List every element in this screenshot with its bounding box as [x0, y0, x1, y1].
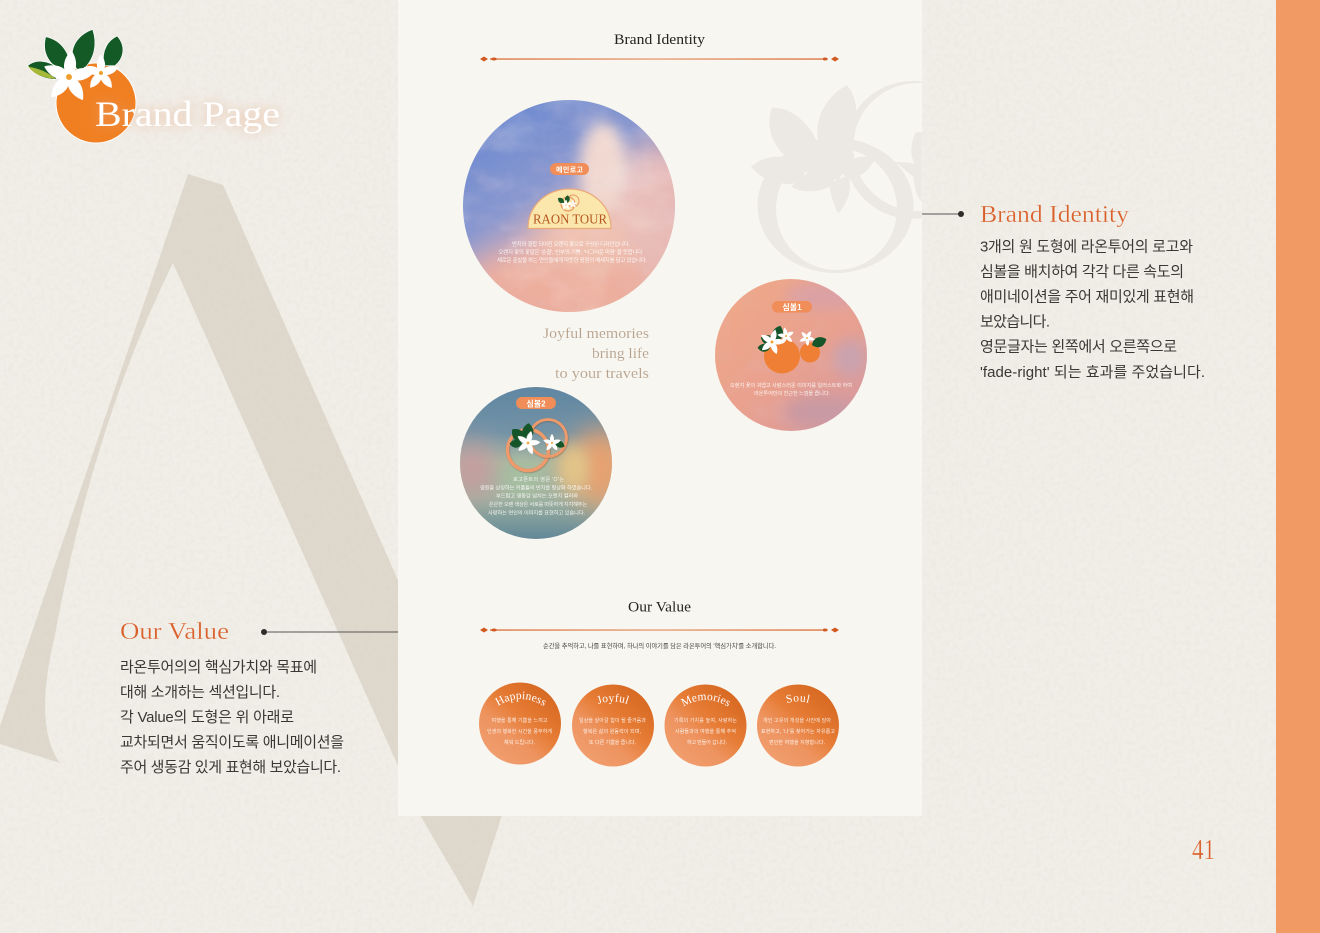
circle: symbol 1: [715, 279, 867, 431]
value circle: Happiness: Happiness: [494, 692, 546, 706]
description: symbol 2: 부드럽고 생동감 넘치는 오렌지 컬러와: [496, 492, 578, 500]
callout text: Our Value: 각 Value의 도형은 위 아래로: [120, 709, 294, 726]
description: main logo: 오렌지 꽃의 꽃말은 '순결', '신부의 기쁨', '너그러운 마음' 을 뜻합니다.: [498, 248, 644, 256]
callout text: Our Value: [120, 659, 344, 776]
divider: Our Value: [480, 628, 839, 632]
value circle: Joyful: 또 다른 기쁨을 줍니다.: [589, 739, 636, 746]
description: symbol 1: 오렌지 꽃의 귀엽고 사랑스러운 이미지를 일러스트화 하여: [730, 381, 852, 389]
value circle: Soul: 개인 고유의 개성을 사진에 담아: [763, 717, 831, 724]
value circle: Happiness: 여행을 통해 기쁨을 느끼고: [492, 717, 548, 724]
value circle: Memories: [664, 684, 746, 766]
value circle: Joyful: 행복은 삶의 원동력이 되며,: [583, 728, 641, 735]
callout: Our Value: [120, 619, 398, 776]
logo badge: RAON TOUR: [528, 189, 611, 228]
value circle: Memories: 사람들과의 여행을 통해 추억: [675, 728, 736, 735]
label: main logo: [550, 163, 589, 175]
right orange band: [1276, 0, 1320, 933]
value circle: Happiness: 채워 드립니다.: [504, 739, 535, 746]
intro sentence: Our Value: 순간을 추억하고, 나를 표현하며, 하나의 이야기를 담은 라온투어의 '핵심가치'를 소개합니다.: [543, 641, 776, 650]
callout text: Brand Identity: 심볼을 배치하여 각각 다른 속도의: [980, 264, 1184, 280]
connector: Brand Identity: [922, 211, 964, 217]
section heading: Our Value: Our Value: [628, 600, 691, 616]
value circle: Joyful: [572, 684, 654, 766]
label: symbol 1: 심볼1: [782, 302, 802, 312]
description: main logo: 새로운 출발을 하는 연인들에게 따뜻한 응원의 메세지를 담고 있습니다.: [497, 256, 647, 264]
value circle: Happiness: [479, 682, 561, 764]
description: symbol 2: 은은한 오렌 색상은 서로를 따뜻하게 지지해주는: [489, 500, 587, 508]
circle: main logo: [463, 100, 690, 319]
watermark logo: [751, 81, 922, 273]
tagline: bring life: [592, 346, 649, 362]
callout text: Brand Identity: [980, 238, 1205, 381]
description: main logo: 반지와 결합 되어진 오렌지 꽃으로 구성된 디자인입니다.: [512, 240, 630, 248]
connector: Our Value: [261, 629, 398, 635]
tagline: [543, 326, 649, 382]
logo badge: RAON TOUR: RAON TOUR: [533, 212, 607, 226]
label: symbol 2: [516, 397, 556, 409]
label: symbol 2: 심볼2: [526, 398, 546, 408]
panel: website preview: [398, 0, 922, 816]
value circle: Soul: 편안한 여행을 지향합니다.: [769, 739, 825, 746]
description: symbol 1: 라온투어만의 친근한 느낌을 줍니다.: [754, 389, 830, 397]
value circle: Joyful: Joyful: [597, 694, 629, 704]
callout text: Brand Identity: 보았습니다.: [980, 314, 1050, 330]
label: symbol 1: [772, 301, 812, 312]
big letter A backdrop: [0, 174, 502, 906]
description: symbol 2: 로고폰트의 영문 'O'는: [513, 475, 564, 483]
description: main logo: [497, 240, 647, 264]
description: symbol 2: [480, 475, 592, 516]
page number: 41: [1192, 835, 1215, 866]
callout text: Our Value: 주어 생동감 있게 표현해 보았습니다.: [120, 759, 341, 776]
callout heading: Brand Identity: Brand Identity: [980, 202, 1129, 228]
value circle: Soul: [757, 684, 839, 766]
callout text: Brand Identity: 영문글자는 왼쪽에서 오른쪽으로: [980, 338, 1177, 356]
callout text: Our Value: 대해 소개하는 섹션입니다.: [120, 684, 280, 701]
tagline: to your travels: [555, 366, 649, 382]
value circle: Memories: 기록의 가치를 높여, 사랑하는: [674, 717, 737, 724]
callout text: Brand Identity: 'fade-right' 되는 효과를 주었습니다.: [980, 364, 1205, 381]
description: symbol 1: [730, 381, 852, 397]
callout text: Our Value: 교차되면서 움직이도록 애니메이션을: [120, 734, 344, 751]
callout text: Our Value: 라온투어의의 핵심가치와 목표에: [120, 659, 317, 676]
value circle: Memories: Memories: [680, 694, 730, 706]
value circle: Soul: 표현하고, '나'를 찾아가는 자유롭고: [761, 728, 835, 735]
divider: Brand Identity: [480, 56, 839, 62]
page title: Brand Page: [95, 94, 280, 134]
logo: orange with leaves and blossoms: [28, 29, 136, 143]
value circle: Joyful: 일상을 살아갈 힘이 될 즐거움과: [579, 717, 646, 724]
callout: Brand Identity: [922, 202, 1205, 381]
callout heading: Our Value: Our Value: [120, 619, 229, 645]
value circle: Memories: 하고 만들어 갑니다.: [687, 739, 727, 746]
description: symbol 2: 사랑하는 연인의 이미지를 표현하고 있습니다.: [488, 508, 585, 516]
label: main logo: 메인로고: [556, 165, 584, 174]
circle: symbol 2: [460, 387, 612, 539]
icon: ring symbol with blossoms: [508, 420, 566, 470]
tagline: Joyful memories: [543, 326, 649, 342]
callout text: Brand Identity: 애미네이션을 주어 재미있게 표현해: [980, 288, 1194, 306]
value circle: Soul: Soul: [786, 694, 810, 703]
value circle: Happiness: 인생의 행복한 시간을 풍부하게: [487, 728, 552, 735]
description: symbol 2: 영원을 상징하는 커플들의 반지를 형상화 하였습니다.: [480, 484, 592, 492]
section heading: Brand Identity: Brand Identity: [614, 32, 706, 48]
callout text: Brand Identity: 3개의 원 도형에 라온투어의 로고와: [980, 238, 1193, 256]
icon: two oranges with blossoms: [756, 324, 828, 374]
